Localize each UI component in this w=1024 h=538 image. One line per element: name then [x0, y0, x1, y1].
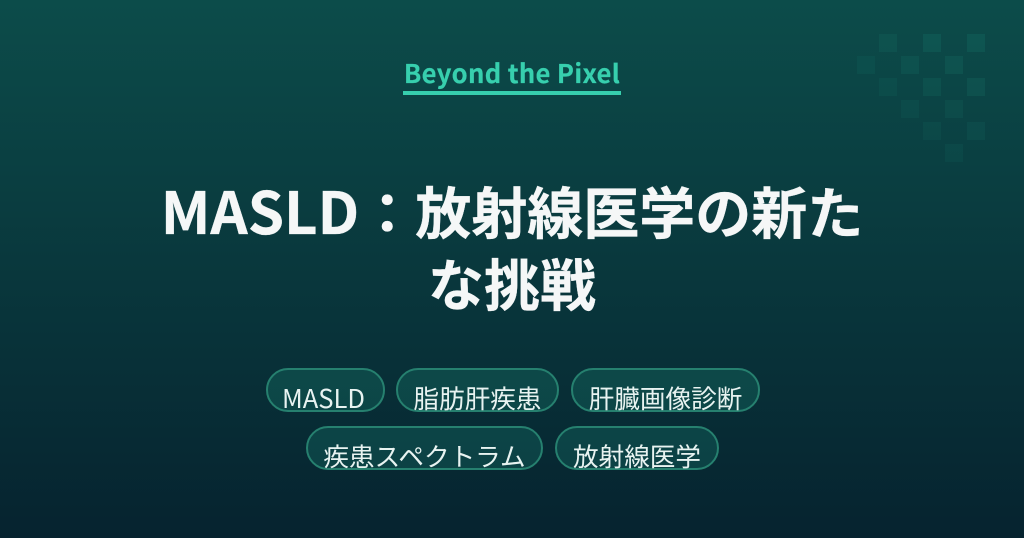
tag: 脂肪肝疾患: 脂肪肝疾患	[414, 379, 541, 416]
tag: 疾患スペクトラム	[306, 426, 543, 470]
tag: 放射線医学	[555, 426, 719, 470]
tag: 疾患スペクトラム: 疾患スペクトラム	[323, 437, 526, 474]
title: MASLD：放射線医学の新た	[161, 166, 863, 251]
tag: MASLD: MASLD	[282, 379, 365, 416]
tag: 放射線医学: 放射線医学	[573, 437, 701, 474]
tag: 肝臓画像診断: 肝臓画像診断	[589, 379, 742, 416]
tag: MASLD	[266, 368, 385, 412]
decorative square pattern	[879, 34, 985, 96]
title	[161, 166, 863, 323]
tag: 脂肪肝疾患	[396, 368, 559, 412]
brand label: Beyond the Pixel: Beyond the Pixel	[404, 54, 620, 91]
title: な挑戦	[428, 242, 596, 323]
tag: 肝臓画像診断	[571, 368, 760, 412]
